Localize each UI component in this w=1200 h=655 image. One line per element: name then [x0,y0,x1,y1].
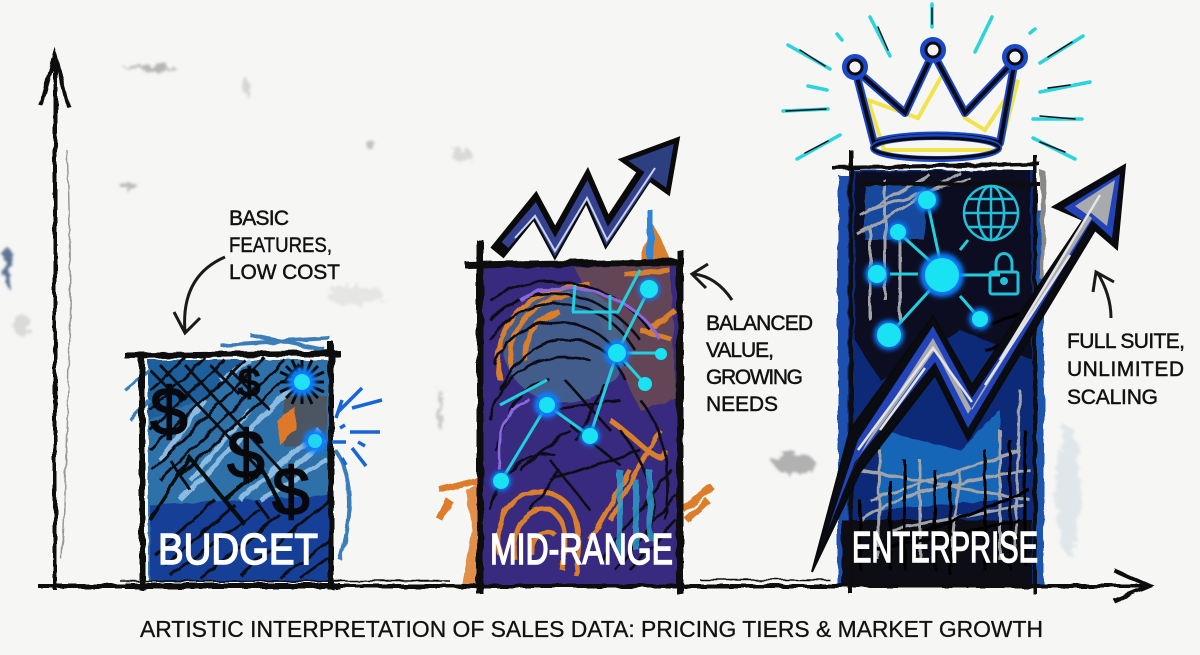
note: enterprise: UNLIMITED [1067,358,1184,381]
enterprise scribbles [858,172,1030,560]
enterprise network [865,188,1000,350]
note: mid-range: VALUE, [706,339,774,362]
note: mid-range: GROWING [706,366,803,389]
note: mid-range [706,312,813,416]
icon: crown [845,40,1025,159]
budget mountain sketch [150,458,285,525]
arrow: enterprise note [1093,272,1114,318]
budget paint fill [125,335,350,582]
note: enterprise: SCALING [1067,386,1158,409]
budget dollar signs [150,361,310,530]
bar: Mid-Range [440,140,712,594]
budget hatching [150,358,332,578]
mid-range swirls [490,270,676,575]
budget dollar signs: $ [238,361,260,405]
mid-range label: MID-RANGE [490,525,673,574]
caption: ARTISTIC INTERPRETATION OF SALES DATA: PRICING TIERS & MARKET GROWTH [140,616,1043,642]
background smudges [4,65,1080,555]
budget dollar signs: $ [272,454,310,530]
bar: Enterprise [783,4,1125,594]
budget dollar signs: $ [227,417,265,493]
mid-range frame [465,240,682,594]
arrow: mid-range note [692,264,732,300]
icon: padlock [990,254,1018,294]
enterprise label: ENTERPRISE [852,523,1038,572]
note: budget: LOW COST [229,261,340,284]
note: enterprise [1067,330,1185,409]
note: mid-range: BALANCED [706,312,813,335]
note: budget [229,207,340,284]
bar: Budget [125,335,382,590]
mid-range network [491,270,667,491]
enterprise frame [832,150,1040,594]
arrow: budget note [174,257,225,333]
budget label: BUDGET [158,525,318,574]
enterprise growth arrow [812,165,1125,572]
note: budget: BASIC [229,207,289,230]
budget sparkle [280,360,382,466]
note: budget: FEATURES, [229,234,332,257]
note: enterprise: FULL SUITE, [1067,330,1185,353]
icon: globe [964,186,1018,240]
mid-range paint fill [440,210,712,588]
x axis arrow [38,570,1150,601]
enterprise paint fill [838,170,1046,586]
budget dollar signs: $ [150,374,188,450]
note: mid-range: NEEDS [706,393,778,416]
crown rays [783,4,1090,159]
y axis arrow [41,55,70,590]
mid-range growth arrow [497,140,677,253]
budget frame [125,342,340,590]
